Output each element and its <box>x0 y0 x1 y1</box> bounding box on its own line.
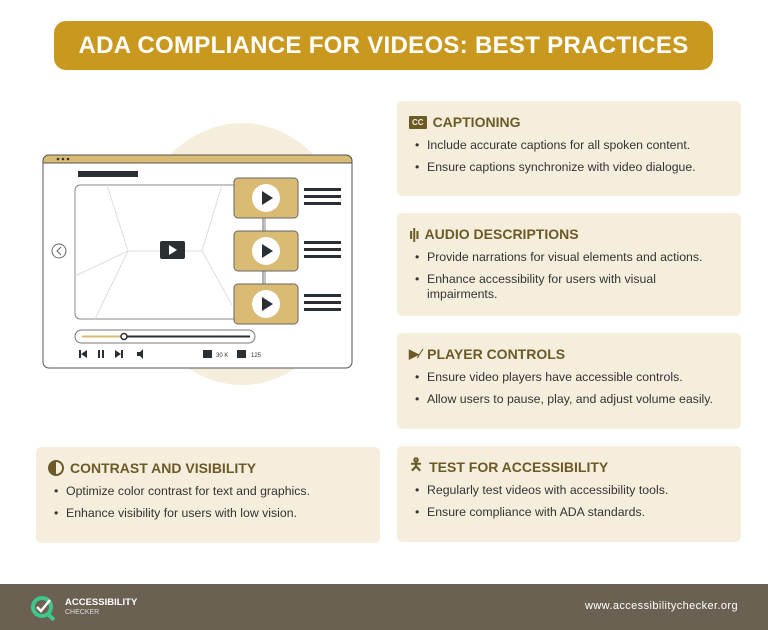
heading: test: TEST FOR ACCESSIBILITY <box>429 459 608 475</box>
text: audio bullets: Provide narrations for visual elements and actions. <box>427 250 702 264</box>
text: test bullets: Ensure compliance with ADA standards. <box>427 505 645 519</box>
panel: captioning <box>397 101 741 196</box>
illustration: video player: 30 K <box>216 353 228 359</box>
text: audio bullets <box>416 250 702 301</box>
heading: player controls: PLAYER CONTROLS <box>427 346 565 362</box>
panel: player controls <box>397 333 741 429</box>
logo <box>31 596 138 621</box>
heading: audio descriptions: AUDIO DESCRIPTIONS <box>425 226 579 242</box>
text: contrast bullets: Optimize color contrast for text and graphics. <box>66 484 310 498</box>
heading: audio descriptions: ı|ı <box>409 226 419 242</box>
text: captioning bullets <box>416 138 696 174</box>
heading: captioning: CC <box>412 118 424 126</box>
url: www.accessibilitychecker.org <box>585 600 738 612</box>
logo: CHECKER <box>65 609 99 616</box>
title <box>54 21 713 70</box>
illustration: video player: 125 <box>251 353 262 359</box>
text: captioning bullets: Include accurate captions for all spoken content. <box>427 138 690 152</box>
illustration: video player <box>42 123 352 385</box>
text: audio bullets: Enhance accessibility for users with visual impairments. <box>427 272 656 301</box>
title: ADA COMPLIANCE FOR VIDEOS: BEST PRACTICES <box>78 32 689 59</box>
text: contrast bullets: Enhance visibility for users with low vision. <box>66 506 297 520</box>
text: player bullets: Allow users to pause, play, and adjust volume easily. <box>427 392 713 406</box>
text: captioning bullets: Ensure captions synchronize with video dialogue. <box>427 160 696 174</box>
footer <box>0 584 768 630</box>
panel: contrast and visibility <box>36 447 380 543</box>
text: player bullets: Ensure video players have accessible controls. <box>427 370 683 384</box>
heading: contrast: CONTRAST AND VISIBILITY <box>70 460 256 476</box>
panel: audio descriptions <box>397 213 741 316</box>
heading: captioning: CAPTIONING <box>433 114 520 130</box>
text: test bullets <box>416 483 668 519</box>
heading: test: 🯅 <box>409 456 423 474</box>
text: test bullets: Regularly test videos with accessibility tools. <box>427 483 668 497</box>
heading: player controls: ▶⁄ <box>409 346 421 361</box>
panel: test for accessibility <box>397 446 741 542</box>
logo: ACCESSIBILITY <box>65 597 137 608</box>
text: contrast bullets <box>54 484 310 520</box>
text: player bullets <box>416 370 713 406</box>
